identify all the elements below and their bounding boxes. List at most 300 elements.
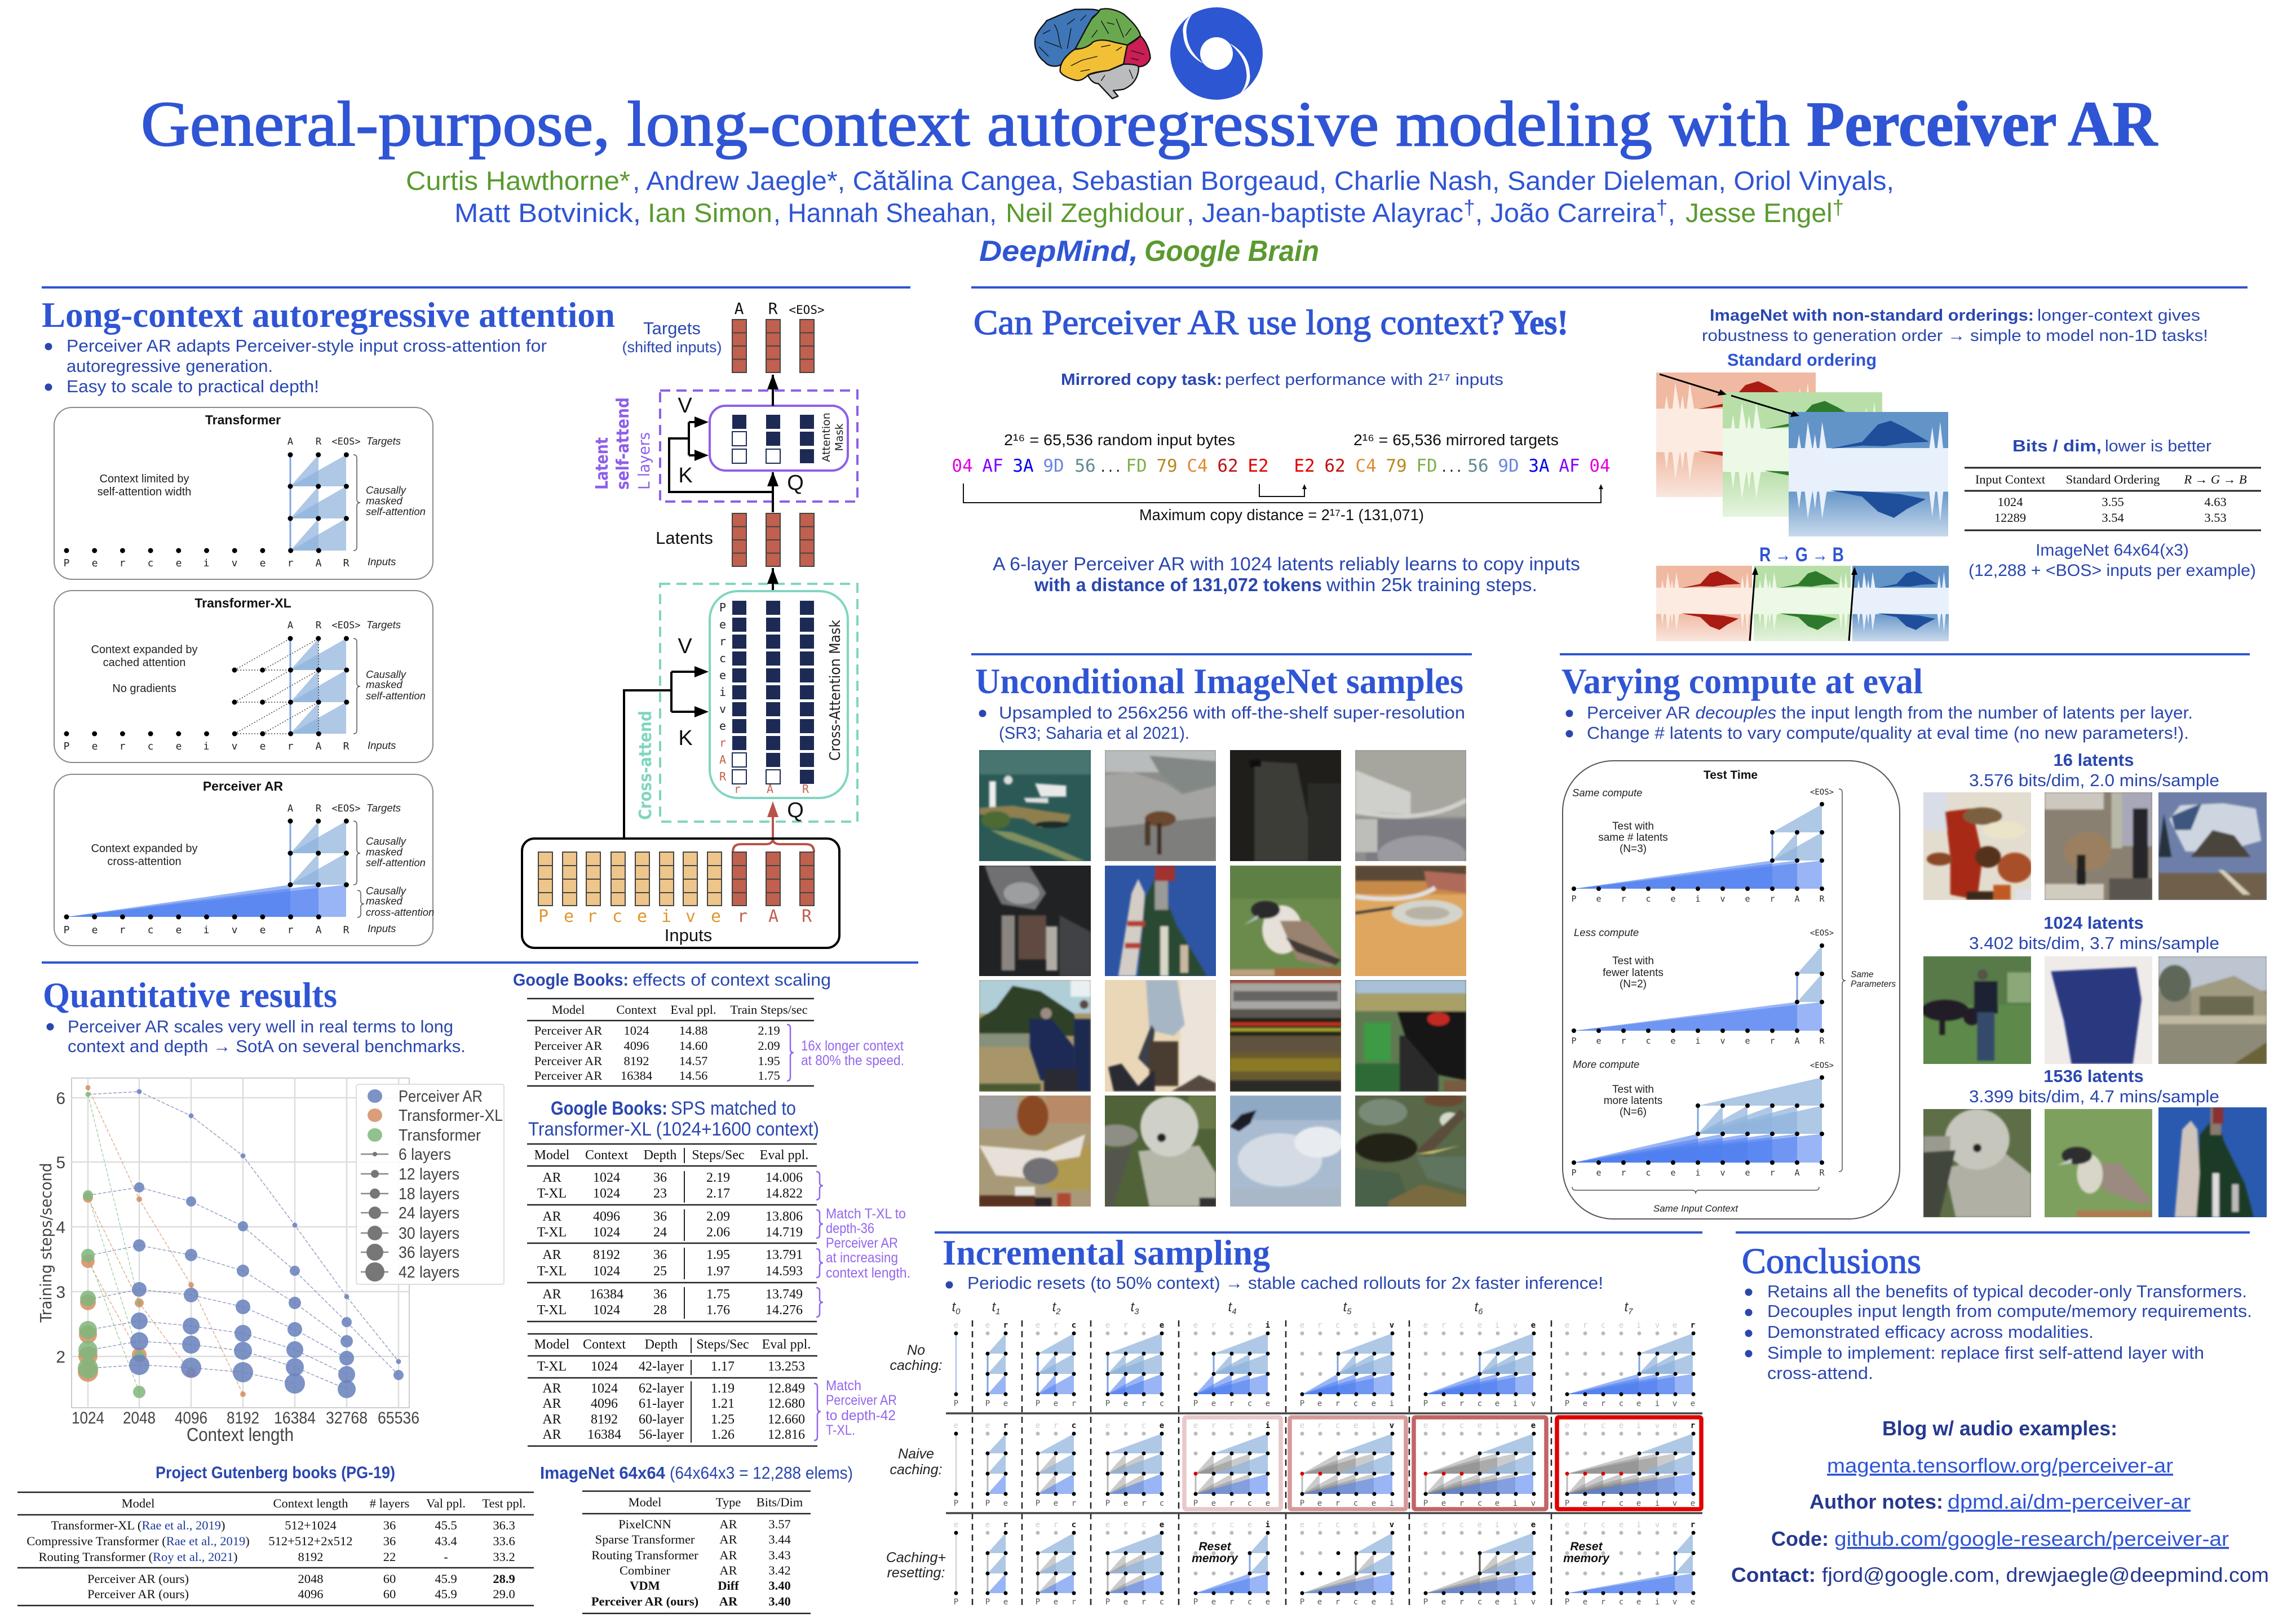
legend: 42 layers bbox=[399, 1263, 459, 1281]
authors: Jesse Engel bbox=[1685, 198, 1830, 228]
table: ImageNet 64x64: AR bbox=[719, 1548, 737, 1562]
cell: t5: Percei bbox=[1300, 1598, 1394, 1607]
diagram: Perceiver AR architecture: L layers bbox=[635, 432, 653, 490]
copy task diagram: 2¹⁶ = 65,536 random input bytes bbox=[1004, 431, 1235, 449]
links and contact: Contact: bbox=[1731, 1563, 1816, 1586]
cell: t0 bbox=[954, 1520, 958, 1607]
row: no caching bbox=[954, 1321, 1695, 1408]
table: Google Books SPS matched: 36 bbox=[653, 1209, 667, 1224]
bullet bbox=[979, 703, 1465, 743]
table: ImageNet 64x64: (64x64x3 = 12,288 elems) bbox=[670, 1463, 853, 1483]
diagram: Transformer-XL: Targets bbox=[366, 619, 401, 631]
table: matching depth-42: AR bbox=[542, 1412, 561, 1427]
cell: t7 reset memory: r bbox=[1691, 1520, 1695, 1529]
table: ImageNet 64x64: AR bbox=[719, 1594, 738, 1608]
scatter chart: training steps per second vs context length: 65536 bbox=[378, 1409, 419, 1427]
diagram: Transformer: Targets bbox=[366, 435, 401, 447]
diagram: Perceiver AR architecture: Cross-Attention Mask bbox=[827, 620, 844, 761]
sub-diagram: more compute: PerceiverAR bbox=[1571, 1168, 1825, 1178]
diagram: Perceiver AR architecture: V bbox=[678, 635, 692, 658]
scatter chart: training steps per second vs context length: Training steps/second bbox=[37, 1163, 55, 1323]
table: bits per dim: 3.53 bbox=[2204, 511, 2227, 525]
table: Google Books SPS matched: 36 bbox=[653, 1248, 667, 1262]
diagram: Perceiver AR architecture: r bbox=[719, 736, 726, 750]
subheading: R G B: R → G → B bbox=[1759, 544, 1844, 566]
table: Project Gutenberg books bbox=[17, 1464, 534, 1606]
cell: t2 bbox=[1036, 1520, 1076, 1607]
table: Google Books SPS matched: AR bbox=[542, 1209, 561, 1224]
diagram: Perceiver AR architecture: e bbox=[719, 668, 726, 682]
diagram: Perceiver AR architecture: r bbox=[719, 635, 726, 648]
table: Google Books SPS matched: 13.791 bbox=[766, 1248, 803, 1262]
table: Google Books SPS matched: 14.822 bbox=[766, 1186, 803, 1201]
table: matching depth-42: 8192 bbox=[591, 1412, 618, 1427]
affiliations: Google Brain bbox=[1144, 235, 1319, 268]
cell: t4 reset memory: memory bbox=[1192, 1552, 1238, 1565]
heading: Varying compute at eval bbox=[1561, 661, 1923, 701]
cell: t5: v bbox=[1390, 1421, 1394, 1430]
table: Google Books context scaling: Perceiver AR bbox=[534, 1039, 602, 1053]
diagram: Perceiver AR: Targets bbox=[366, 802, 401, 814]
table: Google Books SPS matched: 24 bbox=[653, 1225, 667, 1240]
panel: ImageNet non-standard orderings bbox=[1656, 307, 2261, 641]
cell: t7 bbox=[1565, 1421, 1695, 1508]
cell: t2: er bbox=[1036, 1520, 1058, 1529]
table: ImageNet 64x64: 3.42 bbox=[768, 1563, 791, 1577]
sub-diagram: more compute: (N=6) bbox=[1620, 1106, 1647, 1118]
cell: t5: ercei bbox=[1300, 1520, 1376, 1529]
table: Project Gutenberg books: 36 bbox=[383, 1534, 396, 1548]
sub-diagram: same compute bbox=[1571, 787, 1834, 904]
bullet: Upsampled to 256x256 with off-the-shelf super-resolution bbox=[999, 703, 1465, 722]
diagram: Perceiver AR architecture: K bbox=[678, 726, 693, 750]
cell: t2 bbox=[1036, 1321, 1076, 1408]
table: matching depth-42: 12.680 bbox=[768, 1396, 805, 1411]
table: Google Books SPS matched: 2.06 bbox=[706, 1225, 730, 1240]
table: Google Books context scaling: 16384 bbox=[621, 1068, 652, 1083]
time step labels: 1 bbox=[996, 1307, 1001, 1316]
diagram: Perceiver AR: Causally bbox=[366, 835, 407, 847]
row labels: No bbox=[907, 1342, 925, 1358]
copy task diagram: 62 bbox=[1324, 456, 1346, 476]
diagram: Transformer: Transformer bbox=[205, 413, 281, 427]
samples: 1536 latents bbox=[1923, 1066, 2267, 1217]
cell: t5 bbox=[1300, 1421, 1394, 1508]
table: bits per dim: ImageNet 64x64(x3) bbox=[2036, 541, 2189, 560]
cell: t6: erceiv bbox=[1423, 1321, 1518, 1330]
links and contact: Blog w/ audio examples: bbox=[1882, 1417, 2117, 1440]
table: Google Books context scaling: 2.19 bbox=[758, 1023, 780, 1037]
cell: t2: er bbox=[1036, 1421, 1058, 1430]
diagram: test time compute: Parameters bbox=[1851, 979, 1896, 989]
table: ImageNet 64x64: AR bbox=[719, 1563, 737, 1577]
diagram: Perceiver AR: Inputs bbox=[368, 923, 396, 934]
diagram: Perceiver AR: PerceiverAR bbox=[64, 924, 350, 936]
cell: t7 reset memory: memory bbox=[1563, 1552, 1610, 1565]
table: ImageNet 64x64: Diff bbox=[718, 1578, 739, 1593]
row labels bbox=[886, 1342, 946, 1581]
cell: t6: e bbox=[1531, 1321, 1536, 1330]
diagram: Transformer-XL: PerceiverAR bbox=[64, 740, 350, 752]
scatter chart: training steps per second vs context length: Context length bbox=[187, 1424, 294, 1445]
authors: , Hannah Sheahan, bbox=[773, 198, 997, 228]
table: Google Books context scaling: Context bbox=[616, 1003, 657, 1017]
diagram: Perceiver AR architecture: A bbox=[719, 753, 726, 766]
images: standard ordering RGB channels bbox=[1656, 373, 1948, 536]
diagram: Transformer-XL: Inputs bbox=[368, 739, 396, 751]
table: Project Gutenberg books: 33.2 bbox=[493, 1550, 515, 1564]
panel: varying compute at eval bbox=[1561, 661, 2267, 1219]
table: Google Books context scaling: 14.60 bbox=[679, 1039, 707, 1053]
sub-diagram: more compute: Test with bbox=[1612, 1084, 1654, 1096]
table: Google Books SPS matched: 13.806 bbox=[766, 1209, 803, 1224]
copy task result text bbox=[993, 553, 1580, 595]
diagram: Perceiver AR: masked bbox=[366, 895, 402, 907]
copy task diagram: 3A bbox=[1528, 456, 1550, 476]
authors: Ian Simon bbox=[648, 198, 772, 228]
table: Google Books SPS matched: Transformer-XL (1024+1600 context) bbox=[528, 1119, 819, 1140]
table: bits per dim: Input Context bbox=[1975, 472, 2046, 486]
table: ImageNet 64x64: PixelCNN bbox=[618, 1517, 671, 1531]
table: Google Books SPS matched: Google Books: bbox=[551, 1098, 667, 1119]
cell: t4: erce bbox=[1193, 1421, 1252, 1430]
samples: 16 latents: 3.576 bits/dim, 2.0 mins/sample bbox=[1969, 770, 2219, 790]
diagram: Transformer: masked bbox=[366, 495, 402, 507]
cell: t2: Per bbox=[1036, 1499, 1076, 1508]
affiliations: DeepMind, bbox=[979, 235, 1138, 268]
table: Project Gutenberg books: 45.5 bbox=[435, 1518, 457, 1532]
row labels: caching: bbox=[890, 1358, 943, 1373]
sub-diagram: less compute: Less compute bbox=[1574, 926, 1639, 938]
cell: t5: v bbox=[1390, 1520, 1394, 1529]
legend: 18 layers bbox=[399, 1185, 459, 1203]
table: Google Books SPS matched: 1024 bbox=[593, 1225, 620, 1240]
cell: t4 reset memory: erce bbox=[1193, 1520, 1252, 1529]
authors: , Andrew Jaegle*, Cătălina Cangea, Sebastian Borgeaud, Charlie Nash, Sander Dieleman, Oriol Vinyals, bbox=[632, 166, 1894, 196]
table: matching depth-42: Match bbox=[826, 1378, 861, 1394]
table: ImageNet 64x64: 3.44 bbox=[768, 1532, 791, 1546]
cell: t3 bbox=[1105, 1321, 1164, 1408]
table: Google Books SPS matched: 1024 bbox=[593, 1186, 620, 1201]
bullets: Easy to scale to practical depth! bbox=[67, 376, 319, 396]
samples: 16 latents bbox=[1923, 750, 2267, 900]
copy task diagram: 56 bbox=[1074, 456, 1096, 476]
links and contact: Code: bbox=[1771, 1527, 1829, 1550]
sub-diagram: less compute: <EOS> bbox=[1810, 929, 1834, 938]
table: ImageNet 64x64: Bits/Dim bbox=[757, 1495, 803, 1509]
table: ImageNet 64x64: Sparse Transformer bbox=[595, 1532, 695, 1546]
table: Google Books SPS matched: 13.749 bbox=[766, 1287, 803, 1302]
diagram: test time compute: Same Input Context bbox=[1653, 1203, 1738, 1214]
table: Google Books context scaling: Train Steps/sec bbox=[730, 1003, 808, 1017]
cell: t2: c bbox=[1072, 1520, 1076, 1529]
sub-diagram: less compute bbox=[1571, 926, 1834, 1046]
table: Google Books SPS matched: 23 bbox=[653, 1186, 667, 1201]
diagram: Transformer: self-attention bbox=[366, 505, 426, 517]
copy task diagram: ... bbox=[1099, 461, 1122, 475]
diagram: Perceiver AR: masked bbox=[366, 846, 402, 858]
table: Project Gutenberg books: Project Gutenberg books (PG-19) bbox=[156, 1464, 395, 1482]
row: naive caching bbox=[954, 1421, 1695, 1508]
cell: t6: Perceiv bbox=[1423, 1499, 1536, 1508]
copy task result text: with a distance of 131,072 tokens bbox=[1034, 574, 1322, 595]
bullets bbox=[1745, 1281, 2252, 1383]
authors bbox=[406, 166, 1894, 228]
cell: t7: Perceive bbox=[1565, 1499, 1695, 1508]
table: matching depth-42: 13.253 bbox=[768, 1359, 805, 1374]
table: Google Books context scaling: Perceiver AR bbox=[534, 1054, 602, 1068]
table: Google Books SPS matched: context length. bbox=[826, 1265, 910, 1281]
table: matching depth-42: 1024 bbox=[591, 1381, 618, 1396]
heading: Quantitative results bbox=[43, 975, 337, 1015]
table: Project Gutenberg books: 36.3 bbox=[493, 1518, 515, 1532]
cell: t2 bbox=[1036, 1421, 1076, 1508]
cell: t4: i bbox=[1266, 1321, 1270, 1330]
table: Project Gutenberg books: # layers bbox=[370, 1496, 409, 1510]
table: Google Books SPS matched: 4096 bbox=[593, 1209, 620, 1224]
diagram: Perceiver AR architecture: Inputs bbox=[665, 925, 712, 945]
cell: t5: Percei bbox=[1300, 1499, 1394, 1508]
diagram: Transformer: <EOS> bbox=[331, 436, 361, 447]
table: Project Gutenberg books: Compressive Transformer (Rae et al., 2019) bbox=[26, 1534, 250, 1548]
table: ImageNet 64x64: Type bbox=[716, 1495, 741, 1509]
table: ImageNet 64x64: VDM bbox=[630, 1578, 660, 1593]
sub-diagram: less compute: PerceiverAR bbox=[1571, 1036, 1825, 1046]
legend: Transformer bbox=[399, 1127, 481, 1145]
table: Project Gutenberg books: 512+512+2x512 bbox=[268, 1534, 353, 1548]
diagram: Transformer-XL bbox=[54, 591, 433, 762]
copy task diagram: 79 bbox=[1156, 456, 1178, 476]
table: Google Books SPS matched: AR bbox=[542, 1170, 561, 1185]
table: Google Books context scaling: 1.75 bbox=[758, 1068, 780, 1083]
bullets: Demonstrated efficacy across modalities. bbox=[1767, 1322, 2094, 1342]
bullets: Change # latents to vary compute/quality at eval time (no new parameters!). bbox=[1587, 723, 2189, 743]
copy task diagram: FD bbox=[1416, 456, 1437, 476]
cell: t7: Perceive bbox=[1565, 1399, 1695, 1408]
sub-diagram: less compute: fewer latents bbox=[1603, 967, 1664, 979]
diagram: Perceiver AR architecture: K bbox=[678, 464, 693, 487]
icon: brain bbox=[1035, 8, 1151, 99]
title: Perceiver AR bbox=[1807, 89, 2158, 159]
time step labels bbox=[952, 1300, 1633, 1316]
heading: Incremental sampling bbox=[943, 1232, 1270, 1272]
cell: t4: Perce bbox=[1193, 1399, 1270, 1408]
diagram: Transformer-XL: No gradients bbox=[112, 682, 176, 695]
copy task diagram: AF bbox=[982, 456, 1003, 476]
copy task diagram: E2 bbox=[1294, 456, 1315, 476]
table: Project Gutenberg books: 60 bbox=[383, 1587, 396, 1601]
table: matching depth-42: 60-layer bbox=[639, 1412, 684, 1427]
cell: t6: Perceiv bbox=[1423, 1598, 1536, 1607]
row labels: Caching+ bbox=[886, 1550, 946, 1566]
scatter chart: training steps per second vs context length: 4 bbox=[56, 1218, 65, 1237]
table: Google Books SPS matched: 36 bbox=[653, 1170, 667, 1185]
cell: t0: e bbox=[954, 1520, 958, 1529]
table: Google Books context scaling: 1024 bbox=[623, 1023, 649, 1037]
text block bbox=[1702, 307, 2208, 345]
diagram: Transformer: PerceiverAR bbox=[64, 557, 350, 569]
cell: t4 reset memory: i bbox=[1266, 1520, 1270, 1529]
diagram: Transformer-XL: self-attention bbox=[366, 690, 426, 702]
table: matching depth-42: 12.849 bbox=[768, 1381, 805, 1396]
table: matching depth-42: 62-layer bbox=[639, 1381, 684, 1396]
scatter chart: training steps per second vs context length: 1024 bbox=[72, 1409, 104, 1427]
copy task result text: within 25k training steps. bbox=[1326, 574, 1537, 595]
cell: t4 reset memory bbox=[1192, 1520, 1270, 1607]
cell: t7: r bbox=[1691, 1421, 1695, 1430]
cell: t1: e bbox=[985, 1321, 990, 1330]
table: matching depth-42: Context bbox=[583, 1337, 626, 1352]
diagram: Transformer bbox=[54, 407, 433, 579]
diagram: test time compute: Same bbox=[1851, 970, 1874, 979]
bullets: autoregressive generation. bbox=[67, 356, 273, 376]
table: matching depth-42: AR bbox=[542, 1396, 561, 1411]
table: bits per dim: 4.63 bbox=[2204, 495, 2227, 509]
table: matching depth-42: Model bbox=[534, 1337, 570, 1352]
cell: t3: erc bbox=[1105, 1421, 1146, 1430]
text block: ImageNet with non-standard orderings: bbox=[1710, 307, 2034, 325]
table: Google Books SPS matched: 1.95 bbox=[706, 1248, 730, 1262]
cell: t3: erc bbox=[1105, 1321, 1146, 1330]
table: Google Books context scaling: Perceiver AR bbox=[534, 1068, 602, 1083]
time step labels: t bbox=[1343, 1300, 1347, 1315]
cell: t4 reset memory: Reset bbox=[1198, 1540, 1232, 1553]
cell: t0 bbox=[954, 1321, 958, 1408]
scatter chart: training steps per second vs context length bbox=[37, 1078, 504, 1445]
diagram: Transformer-XL: Causally bbox=[366, 668, 407, 680]
table: ImageNet 64x64: AR bbox=[719, 1532, 737, 1546]
cell: t3: Perc bbox=[1105, 1598, 1164, 1607]
legend: Perceiver AR bbox=[399, 1088, 483, 1106]
time step labels: t bbox=[1228, 1300, 1232, 1315]
table: Project Gutenberg books: 45.9 bbox=[435, 1587, 457, 1601]
diagram: Perceiver AR architecture: A bbox=[767, 782, 773, 796]
bullets bbox=[1566, 703, 2193, 743]
cell: t2: c bbox=[1072, 1321, 1076, 1330]
copy task diagram: 04 bbox=[1589, 456, 1611, 476]
time step labels: 0 bbox=[955, 1307, 961, 1316]
table: Google Books context scaling: 16x longer context bbox=[801, 1038, 904, 1054]
cell: t7: erceive bbox=[1565, 1321, 1677, 1330]
panel: incremental sampling bbox=[886, 1232, 1702, 1607]
bullets: Perceiver AR adapts Perceiver-style input cross-attention for bbox=[67, 336, 547, 356]
diagram: Transformer-XL: A bbox=[287, 620, 293, 631]
table: Google Books SPS matched: 1.97 bbox=[706, 1264, 730, 1279]
samples: 1024 latents bbox=[1921, 913, 2267, 1064]
table: matching depth-42: AR bbox=[542, 1427, 561, 1442]
cell: t0: P bbox=[954, 1399, 958, 1408]
copy task diagram: 9D bbox=[1498, 456, 1519, 476]
sub-diagram: same compute: same # latents bbox=[1598, 832, 1668, 844]
cell: t6 bbox=[1423, 1520, 1536, 1607]
table: bits per dim: lower is better bbox=[2105, 437, 2211, 455]
table: ImageNet 64x64: AR bbox=[719, 1517, 737, 1531]
legend: 36 layers bbox=[399, 1244, 459, 1262]
cell: t5: v bbox=[1390, 1321, 1394, 1330]
cell: t4 bbox=[1193, 1421, 1270, 1508]
samples: 1024 latents: 1024 latents bbox=[2043, 913, 2144, 933]
cell: t1: r bbox=[1003, 1321, 1008, 1330]
panel: long-context autoregressive attention bbox=[42, 295, 857, 948]
frames: naive caching memory growth highlights bbox=[1184, 1417, 1701, 1509]
mirrored copy task text: Mirrored copy task: bbox=[1061, 371, 1222, 389]
table: Google Books context scaling: Perceiver AR bbox=[534, 1023, 602, 1037]
table: Project Gutenberg books: 36 bbox=[383, 1518, 396, 1532]
bullets: cross-attend. bbox=[1767, 1363, 1873, 1383]
scatter chart: training steps per second vs context length: 4096 bbox=[175, 1409, 207, 1427]
diagram: Perceiver AR architecture: Targets bbox=[643, 318, 701, 338]
table: Project Gutenberg books: 33.6 bbox=[493, 1534, 515, 1548]
table: matching depth-42: 12.816 bbox=[768, 1427, 805, 1442]
table: bits per dim: Standard Ordering bbox=[2066, 472, 2160, 486]
diagram: Perceiver AR architecture: self-attend bbox=[613, 397, 633, 490]
diagram: Perceiver AR architecture: Mask bbox=[833, 424, 846, 451]
table: matching depth-42: T-XL. bbox=[826, 1422, 855, 1438]
diagram: Perceiver AR architecture: (shifted inputs) bbox=[622, 339, 722, 356]
samples: 1536 latents: 3.399 bits/dim, 4.7 mins/sample bbox=[1969, 1087, 2219, 1106]
table: Project Gutenberg books: 29.0 bbox=[493, 1587, 515, 1601]
diagram: Perceiver AR architecture: e bbox=[719, 618, 726, 631]
table: Project Gutenberg books: Routing Transformer (Roy et al., 2021) bbox=[38, 1550, 238, 1564]
diagram: Transformer-XL: <EOS> bbox=[331, 620, 361, 631]
bullets: Perceiver AR decouples the input length from the number of latents per layer. bbox=[1587, 703, 2193, 722]
table: Google Books SPS matched: 1024 bbox=[593, 1170, 620, 1185]
diagram: Transformer-XL: masked bbox=[366, 679, 402, 690]
diagram: Transformer: Inputs bbox=[368, 556, 396, 567]
links and contact: magenta.tensorflow.org/perceiver-ar bbox=[1827, 1454, 2173, 1477]
diagram: Perceiver AR architecture: V bbox=[678, 394, 692, 418]
cell: t4 bbox=[1193, 1321, 1270, 1408]
cell: t7 reset memory bbox=[1563, 1520, 1695, 1607]
table: matching depth-42: to depth-42 bbox=[826, 1408, 896, 1424]
scatter chart: training steps per second vs context length: 2048 bbox=[123, 1409, 156, 1427]
table: Google Books SPS matched: 14.719 bbox=[766, 1225, 803, 1240]
cell: t7: erceive bbox=[1565, 1421, 1677, 1430]
table: Google Books SPS matched: Eval ppl. bbox=[760, 1148, 808, 1163]
table: Project Gutenberg books: Model bbox=[122, 1496, 154, 1510]
legend bbox=[356, 1084, 504, 1284]
copy task diagram: 56 bbox=[1467, 456, 1489, 476]
table: Google Books SPS matched: T-XL bbox=[537, 1264, 567, 1279]
cell: t1: Pe bbox=[985, 1598, 1008, 1607]
table: bits per dim: Bits / dim, bbox=[2012, 437, 2102, 455]
table: Project Gutenberg books: 28.9 bbox=[493, 1572, 515, 1586]
copy task diagram: E2 bbox=[1247, 456, 1269, 476]
heading: Long-context autoregressive attention bbox=[42, 295, 615, 335]
diagram: Perceiver AR: Context expanded by bbox=[91, 842, 198, 855]
table: matching depth-42: 61-layer bbox=[639, 1396, 684, 1411]
table: Google Books SPS matched: at increasing bbox=[826, 1250, 898, 1266]
cell: t0 bbox=[954, 1421, 958, 1508]
table: Project Gutenberg books: Perceiver AR (ours) bbox=[87, 1572, 189, 1586]
cell: t6: Perceiv bbox=[1423, 1399, 1536, 1408]
table: ImageNet 64x64: Model bbox=[629, 1495, 661, 1509]
time step labels: t bbox=[1624, 1300, 1628, 1315]
time step labels: 7 bbox=[1628, 1307, 1633, 1316]
cell: t5 bbox=[1300, 1321, 1394, 1408]
table: bits per dim: 12289 bbox=[1994, 511, 2026, 525]
diagram: Perceiver AR architecture: R bbox=[768, 299, 778, 318]
panel: quantitative results bbox=[17, 970, 910, 1613]
table: Google Books SPS matched: 25 bbox=[653, 1264, 667, 1279]
copy task diagram: 62 bbox=[1217, 456, 1238, 476]
links and contact: Author notes: bbox=[1810, 1490, 1943, 1513]
bullet bbox=[46, 1017, 466, 1056]
heading: Can Perceiver AR use long context? bbox=[974, 304, 1505, 342]
copy task diagram: 79 bbox=[1386, 456, 1407, 476]
diagram: Perceiver AR architecture: P bbox=[719, 601, 726, 614]
diagram: Perceiver AR architecture: Latents bbox=[656, 528, 713, 548]
